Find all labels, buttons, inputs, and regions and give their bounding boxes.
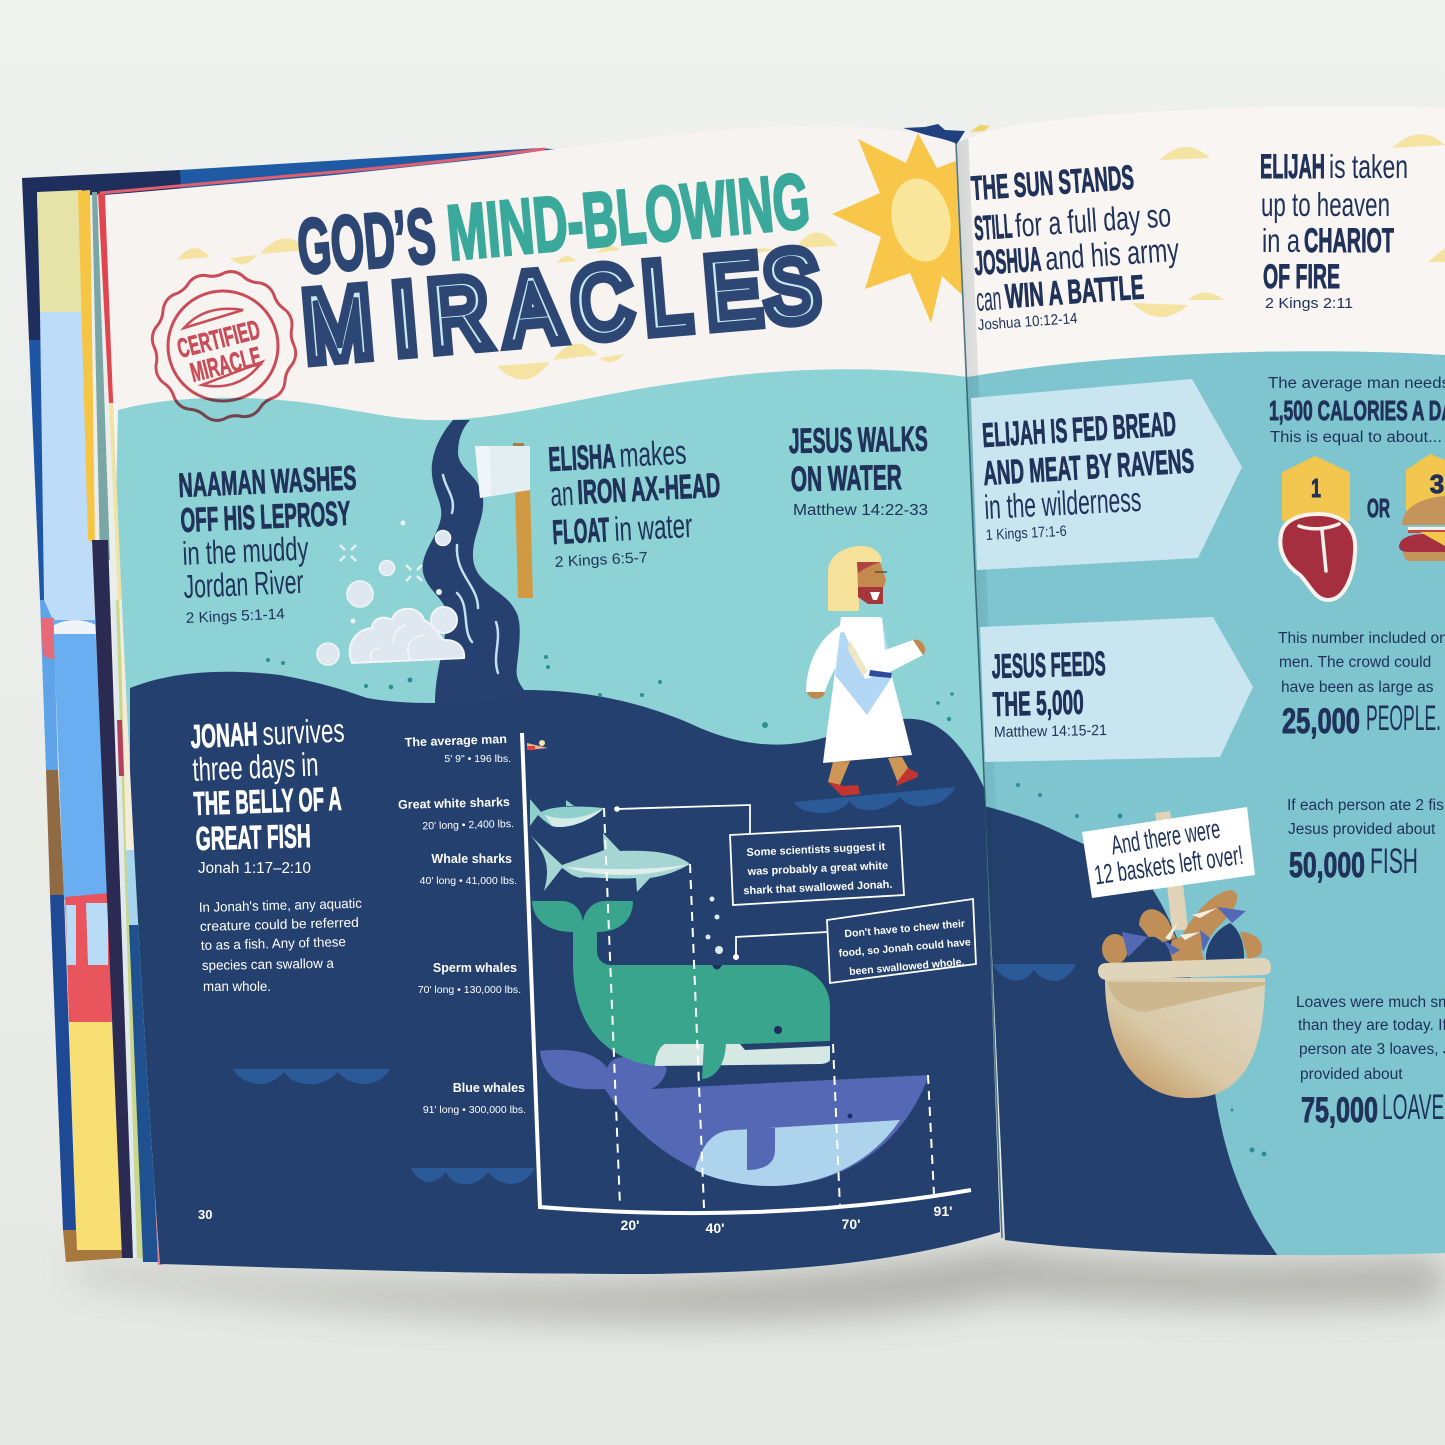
text: Elisha: an — [549, 475, 574, 514]
text: Naaman: in the muddy — [182, 530, 310, 572]
text: calories — [1268, 375, 1445, 446]
sign: twelve baskets: And there were — [1109, 814, 1222, 861]
callout: sperm whale — [733, 899, 976, 983]
icon: burgers with badge: 3 — [1430, 469, 1444, 499]
text: Elisha: in water — [613, 507, 693, 549]
clouds: left page — [177, 232, 838, 380]
text: sun stands still: WIN A BATTLE — [1004, 268, 1145, 316]
text: Elijah fed: in the wilderness — [983, 481, 1142, 527]
clouds: right page — [1132, 134, 1445, 317]
sign: twelve baskets: 12 baskets left over! — [1092, 840, 1245, 890]
axis labels: 91' — [934, 1203, 952, 1219]
species labels: 70' long • 130,000 lbs. — [418, 984, 521, 996]
loaves — [1102, 890, 1262, 964]
callout: sperm whale: Don't have to chew their — [844, 918, 966, 940]
icon: burgers with badge — [1399, 454, 1445, 561]
jesus figure — [806, 546, 925, 796]
text: Jesus walks: Matthew 14:22-33 — [793, 502, 928, 519]
text: Jesus feeds — [991, 645, 1107, 741]
spine detail — [903, 124, 990, 144]
callout: great white — [614, 805, 904, 905]
title: Mind-Blowing: MIND-BLOWING — [444, 156, 813, 277]
text: Jesus feeds: THE 5,000 — [992, 684, 1084, 724]
axis labels: 40' — [706, 1220, 724, 1236]
sun — [832, 133, 962, 323]
axis labels — [621, 1203, 952, 1236]
teal area — [950, 351, 1445, 1260]
great white shark — [530, 799, 604, 827]
gutter shadow: right — [957, 138, 996, 808]
fish — [1128, 923, 1244, 962]
text: 75,000 loaves: provided about — [1300, 1066, 1403, 1083]
species labels: Whale sharks — [431, 852, 512, 866]
text: Jesus walks: JESUS WALKS — [788, 420, 928, 461]
text: Elisha: FLOAT — [551, 511, 610, 552]
title: God's: GOD’S — [294, 191, 439, 291]
text: or: OR — [1367, 493, 1390, 523]
sign post — [1155, 811, 1188, 930]
text: Naaman: Jordan River — [183, 563, 304, 605]
title: Miracles inline: MIRACLES — [300, 231, 823, 381]
species labels — [398, 732, 526, 1116]
text: sun stands still: can — [975, 279, 1002, 318]
text: 25,000 people: men. The crowd could — [1279, 654, 1431, 671]
whale shark — [530, 833, 690, 892]
text: Jonah: species can swallow a — [202, 956, 335, 973]
text: Naaman: NAAMAN WASHES — [178, 459, 357, 505]
icon: axe — [475, 443, 533, 598]
text: calories: This is equal to about... — [1270, 429, 1442, 446]
text: Jesus walks: ON WATER — [790, 458, 902, 499]
water scallop — [993, 964, 1076, 981]
species labels: Sperm whales — [433, 961, 517, 975]
text: sun stands still: Joshua 10:12-14 — [977, 310, 1078, 334]
text: sun stands still — [970, 159, 1181, 334]
teal dots — [266, 655, 954, 728]
text: 75,000 loaves: 75,000 — [1301, 1091, 1378, 1130]
book shadow — [70, 1250, 1445, 1318]
text: 50,000 fish — [1287, 797, 1445, 885]
text: Elisha: 2 Kings 6:5-7 — [554, 549, 648, 571]
text: Elisha — [547, 434, 721, 571]
text: Jonah: JONAH — [190, 715, 258, 755]
seal: certified miracle: MIRACLE — [187, 341, 264, 388]
species labels: Blue whales — [453, 1081, 525, 1095]
page number: 30 — [198, 1207, 212, 1222]
text: sun stands still: and his army — [1044, 231, 1181, 277]
callout: great white: shark that swallowed Jonah. — [743, 879, 893, 897]
text: sun stands still: THE SUN STANDS — [970, 159, 1135, 208]
species labels: 40' long • 41,000 lbs. — [420, 875, 517, 887]
icon: steak with badge: 1 — [1311, 473, 1321, 503]
navy shape — [980, 805, 1278, 1256]
text: Naaman: 2 Kings 5:1-14 — [185, 606, 285, 627]
text: Elijah chariot: in a — [1262, 222, 1300, 259]
axes — [522, 733, 971, 1213]
seal: certified miracle — [144, 263, 304, 429]
text: 25,000 people: have been as large as — [1281, 679, 1434, 696]
water scallops — [233, 787, 955, 1184]
species labels: 91' long • 300,000 lbs. — [423, 1104, 526, 1116]
text: Jonah: survives — [262, 711, 345, 752]
teal water area — [100, 369, 1010, 1300]
pentagon: Jesus feeds — [980, 617, 1253, 762]
rim — [1098, 958, 1271, 980]
species labels: 20' long • 2,400 lbs. — [422, 818, 514, 832]
text: sun stands still: JOSHUA — [973, 240, 1042, 283]
text: Elisha: IRON AX-HEAD — [576, 467, 721, 512]
callout: sperm whale: been swallowed whole. — [849, 956, 965, 978]
text: Elijah fed — [981, 405, 1195, 544]
bowl shade — [1107, 982, 1265, 1012]
river ripples — [443, 475, 498, 673]
text: Jonah: three days in — [192, 746, 319, 788]
chart: whale size comparison — [398, 732, 976, 1236]
text: Jonah: THE BELLY OF A — [193, 780, 342, 822]
text: Jonah: GREAT FISH — [195, 817, 311, 857]
text: Jonah: man whole. — [203, 979, 271, 994]
right page — [950, 100, 1445, 1260]
text: 50,000 fish: Jesus provided about — [1288, 821, 1436, 838]
text: Jonah: Jonah 1:17–2:10 — [198, 860, 311, 877]
axis labels: 20' — [621, 1217, 639, 1233]
page white background — [957, 106, 1445, 377]
species labels: The average man — [405, 732, 507, 750]
pentagon: Elijah fed — [971, 379, 1242, 570]
bubbles — [706, 896, 723, 954]
text: 75,000 loaves — [1296, 994, 1445, 1130]
species labels: Great white sharks — [398, 795, 510, 812]
seal: certified miracle: CERTIFIED — [174, 314, 263, 364]
text: Jesus feeds: Matthew 14:15-21 — [994, 722, 1107, 741]
title: Miracles base: MIRACLES — [300, 231, 823, 381]
icon: soap bubbles — [317, 520, 464, 665]
sperm whale — [532, 901, 830, 1079]
text: Jesus walks — [788, 420, 928, 519]
text: 50,000 fish: 50,000 — [1289, 846, 1365, 885]
text: Elisha: ELISHA — [547, 438, 616, 479]
left page — [90, 110, 1010, 1300]
text: Jonah — [190, 711, 362, 994]
text: Naaman: OFF HIS LEPROSY — [180, 495, 351, 540]
page white background — [105, 135, 966, 1264]
text: Elijah chariot: ELIJAH — [1260, 148, 1325, 186]
callout: sperm whale: food, so Jonah could have — [838, 936, 971, 960]
book cover and page stack — [22, 148, 565, 1265]
blue whale — [540, 1050, 929, 1186]
text: Jonah: to as a fish. Any of these — [201, 934, 346, 953]
text: 25,000 people — [1278, 630, 1445, 741]
icon: steak with badge — [1280, 457, 1355, 600]
sign: twelve baskets — [1082, 807, 1255, 898]
axis labels: 70' — [842, 1216, 860, 1232]
teal dots — [1016, 783, 1266, 1156]
callout: great white: was probably a great white — [746, 860, 888, 878]
species labels: 5' 9" • 196 lbs. — [444, 753, 511, 765]
text: Elijah chariot — [1260, 148, 1408, 312]
text: Elijah fed: AND MEAT BY RAVENS — [982, 442, 1195, 493]
text: Elijah chariot: OF FIRE — [1263, 258, 1340, 296]
infographic: open book spread: JESUS FEEDS — [991, 645, 1106, 686]
river — [423, 420, 532, 705]
text: Naaman — [178, 459, 357, 627]
bowl — [1105, 978, 1265, 1098]
dashed length markers — [604, 808, 934, 1208]
text: 25,000 people: 25,000 — [1282, 702, 1360, 741]
title — [294, 156, 823, 381]
text: sun stands still: STILL — [973, 207, 1013, 248]
text: Elisha: makes — [618, 434, 687, 475]
text: Elijah chariot: 2 Kings 2:11 — [1265, 295, 1353, 312]
text: Elijah fed: ELIJAH IS FED BREAD — [981, 405, 1177, 455]
text: Elijah chariot: is taken — [1329, 148, 1408, 185]
text: Elijah fed: 1 Kings 17:1-6 — [985, 523, 1067, 544]
text: calories: The average man needs — [1268, 375, 1445, 392]
swimmer icon — [527, 740, 548, 750]
callout: great white: Some scientists suggest it — [746, 841, 886, 859]
navy sea — [130, 672, 1010, 1300]
gutter line — [956, 143, 1002, 1238]
text: Jonah: creature could be referred — [200, 915, 359, 934]
icon: basket of bread and fish — [1098, 811, 1271, 1098]
text: Jonah: In Jonah's time, any aquatic — [199, 896, 362, 915]
text: sun stands still: for a full day so — [1014, 196, 1172, 244]
